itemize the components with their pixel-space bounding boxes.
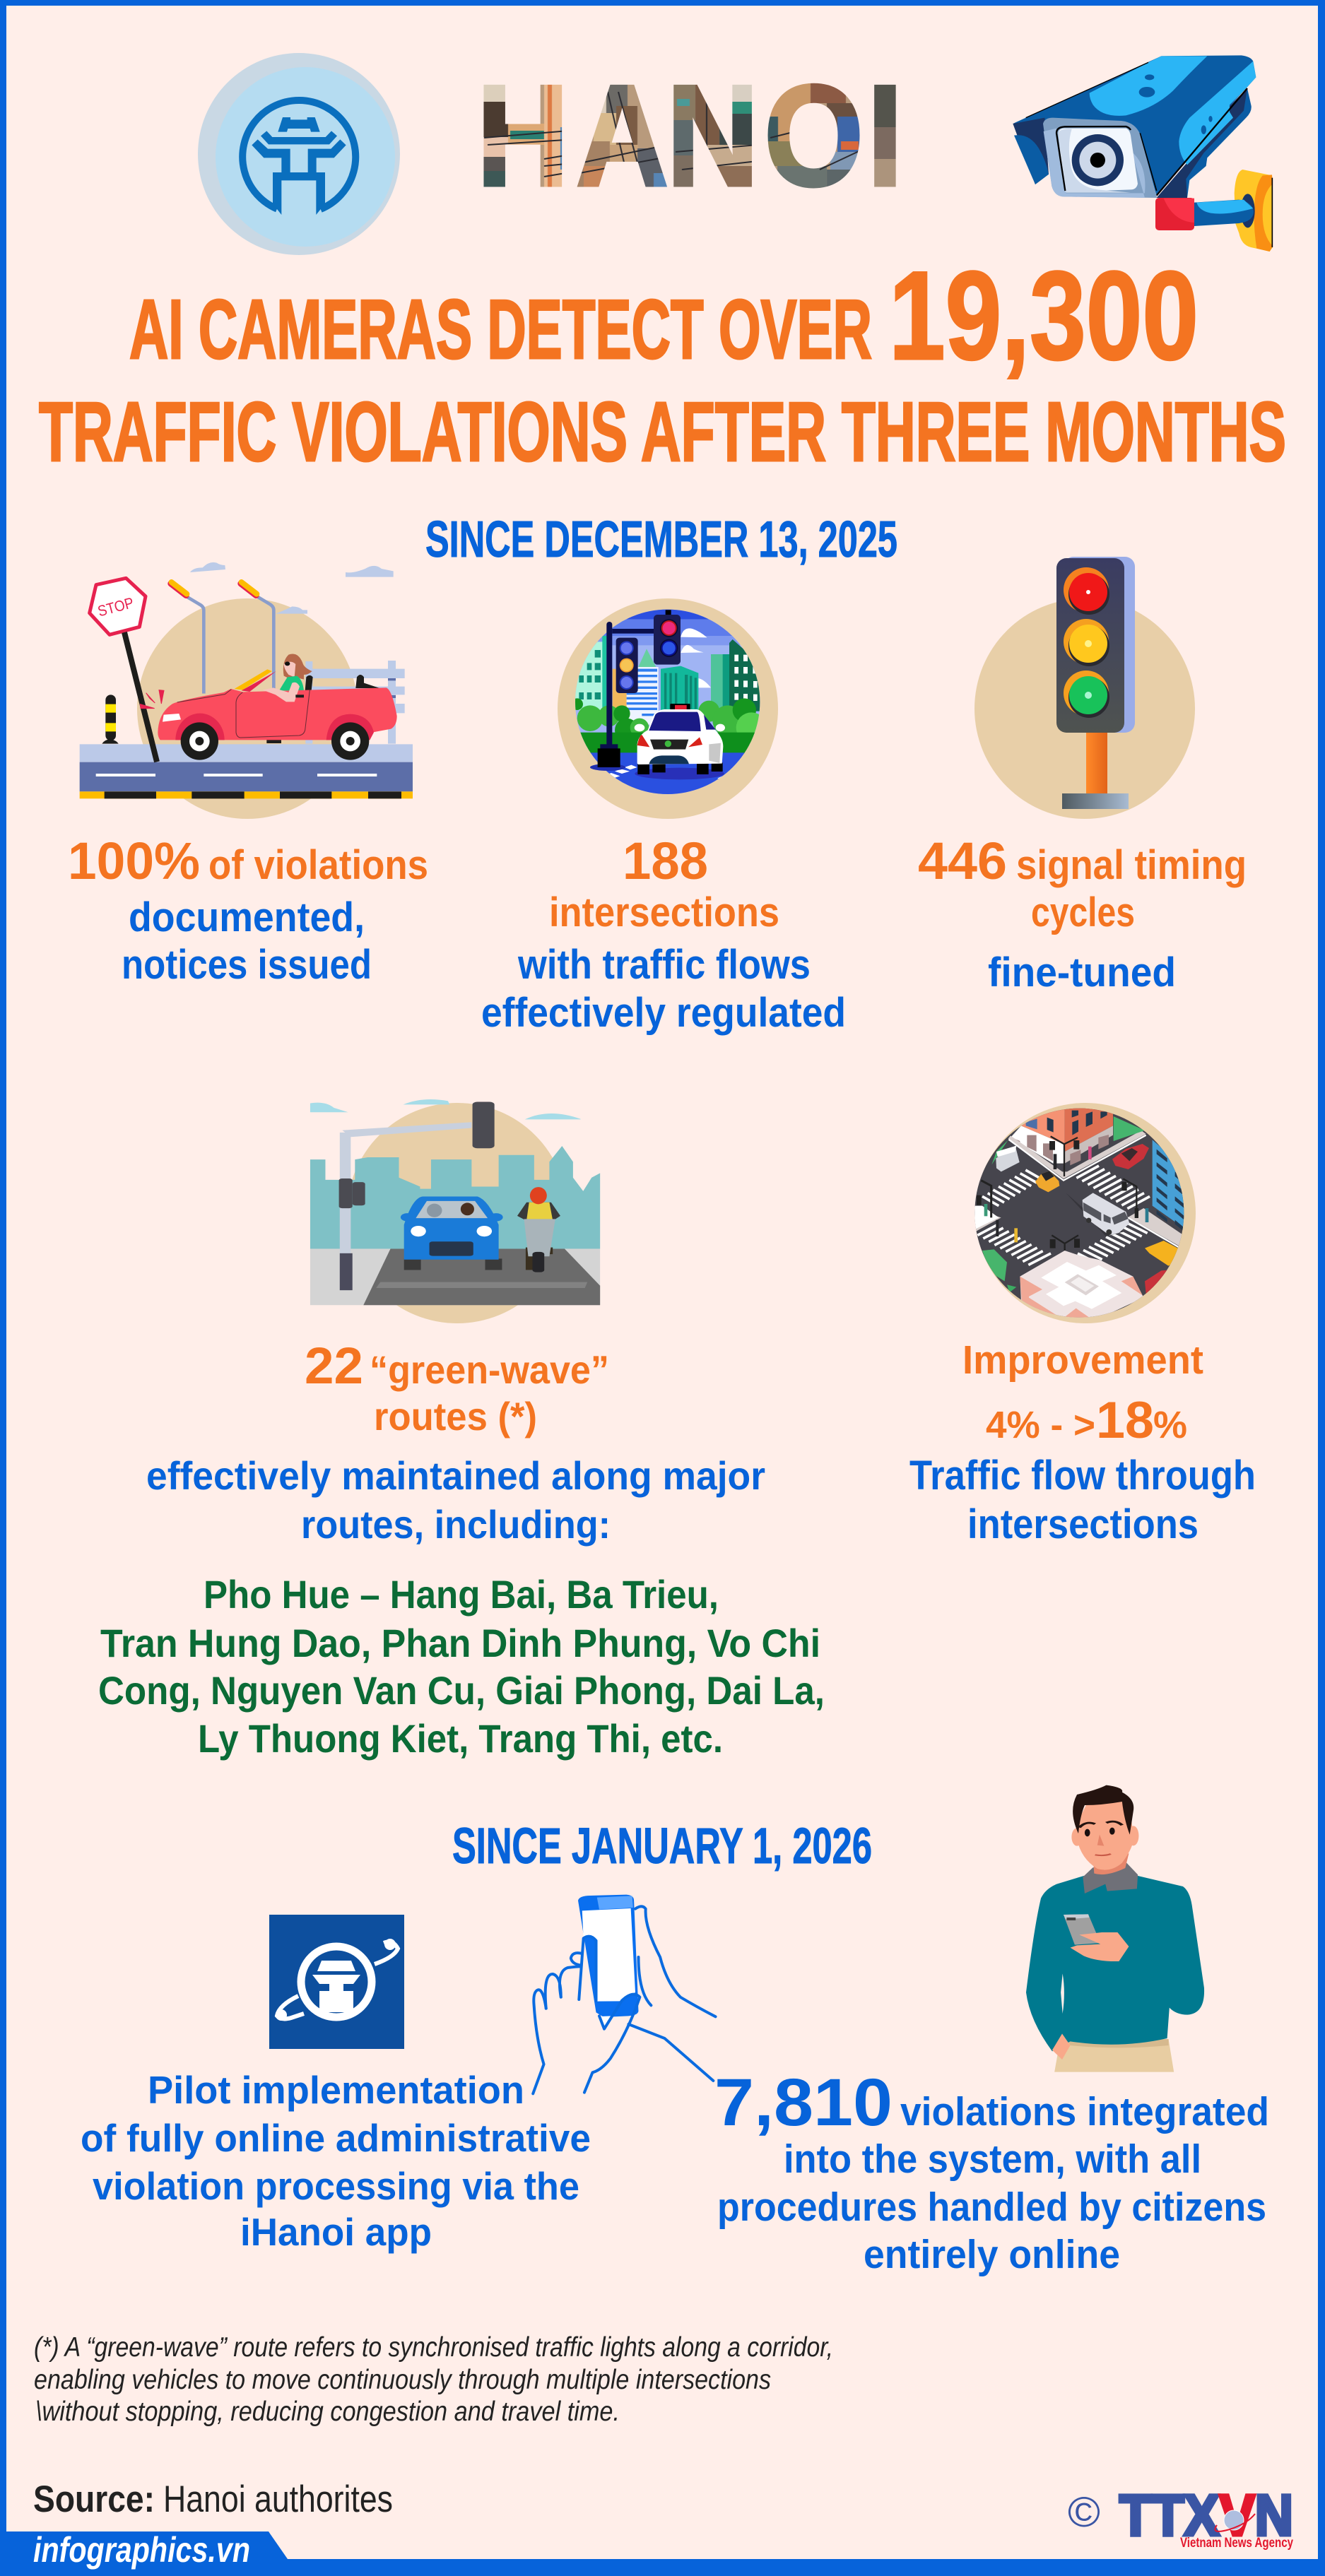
text: list of routes: Pho Hue – Hang Bai, Ba Trieu, (204, 1572, 719, 1617)
text: maintained along major routes (146, 1453, 765, 1547)
label: intersections: intersections (549, 890, 779, 935)
icon: surveillance camera (1013, 55, 1273, 252)
label: routes (*): routes (*) (374, 1394, 537, 1438)
text: traffic flows regulated: with traffic flows (517, 942, 811, 988)
stat: 446 signal timing: signal timing (1016, 842, 1247, 888)
text: traffic flow through intersections (909, 1453, 1256, 1547)
stat: 22 green-wave: “green-wave” (370, 1347, 609, 1392)
text: handled entirely online: entirely online (864, 2232, 1120, 2277)
source line: Hanoi authorites (163, 2478, 393, 2520)
icon: car hitting stop sign: STOP (96, 594, 136, 620)
text: traffic flow through intersections: Traffic flow through (909, 1453, 1256, 1499)
footnote (34, 2332, 833, 2427)
stat: 188: 188 (623, 832, 708, 890)
stat: 4% to 18% (986, 1392, 1187, 1449)
text: maintained along major routes: effectively maintained along major (146, 1453, 765, 1498)
stat: 446 signal timing (918, 832, 1247, 890)
icon: isometric intersection (974, 1108, 1184, 1318)
footnote: enabling vehicles to move continuously through multiple intersections (34, 2365, 771, 2395)
header: HANOI photo lettering: HANOI (477, 55, 903, 215)
stat: 22 green-wave: 22 (305, 1337, 363, 1395)
panel: 7,810 violations integrated (714, 1785, 1269, 2277)
text: list of routes (98, 1572, 825, 1761)
logo: TTXVN Vietnam News Agency: Vietnam News Agency (1180, 2536, 1293, 2551)
text: fine-tuned: fine-tuned (988, 950, 1176, 995)
text: handled entirely online: into the system, with all (784, 2137, 1201, 2182)
footnote: (*) A “green-wave” route refers to synchronised traffic lights along a corridor, (34, 2332, 833, 2363)
text: traffic flows regulated: effectively regulated (481, 990, 846, 1036)
stat: 7,810 violations integrated: violations integrated (900, 2089, 1269, 2134)
stat: 100% of violations (68, 832, 428, 890)
label: cycles: cycles (1031, 890, 1135, 935)
text: pilot implementation: iHanoi app (240, 2210, 432, 2254)
label: improvement: Improvement (962, 1337, 1203, 1383)
text: pilot implementation: Pilot implementation (148, 2068, 524, 2112)
stat: 446 signal timing: 446 (918, 832, 1007, 890)
text: handled entirely online (717, 2137, 1266, 2277)
icon: traffic light (1056, 557, 1135, 809)
text: pilot implementation (81, 2068, 591, 2254)
text: documented notices issued: notices issued (122, 942, 372, 988)
panel: iHanoi pilot (81, 1895, 716, 2254)
text: documented notices issued (122, 894, 372, 988)
text: pilot implementation: of fully online administrative (81, 2116, 591, 2160)
icon: iHanoi app logo (269, 1915, 404, 2049)
panel: 446 signal timing cycles (918, 557, 1247, 995)
section heading: since December: SINCE DECEMBER 13, 2025 (425, 512, 897, 568)
illustration: man with smartphone (1026, 1785, 1204, 2072)
icon: car hitting stop sign (80, 562, 413, 798)
text: traffic flow through intersections: intersections (967, 1501, 1199, 1547)
logo: TTXVN Vietnam News Agency: © (1068, 2488, 1100, 2536)
header: Hanoi emblem (198, 53, 400, 255)
logo: TTXVN Vietnam News Agency: TTXVN (1119, 2483, 1293, 2548)
footnote: \without stopping, reducing congestion and travel time. (35, 2397, 620, 2427)
stat: 100% of violations: of violations (208, 842, 428, 888)
stat: 7,810 violations integrated (714, 2065, 1269, 2140)
stat: 4% to 18%: 4% - > (986, 1404, 1095, 1446)
text: documented notices issued: documented, (129, 894, 365, 940)
text: traffic flows regulated (481, 942, 846, 1036)
text: pilot implementation: violation processing via the (93, 2164, 579, 2208)
source line (33, 2478, 393, 2520)
panel: 188 intersections (481, 598, 846, 1036)
stat: 100% of violations: 100% (68, 832, 200, 890)
text: list of routes: Ly Thuong Kiet, Trang Thi, etc. (198, 1716, 723, 1761)
text: list of routes: Tran Hung Dao, Phan Dinh Phung, Vo Chi (100, 1621, 820, 1665)
stat: 7,810 violations integrated: 7,810 (714, 2065, 893, 2140)
icon: hand holding phone (533, 1895, 716, 2093)
panel: green-wave routes (98, 1099, 825, 1761)
title highlight number: 19,300 (889, 245, 1199, 386)
footer tab: infographics.vn: infographics.vn (33, 2530, 250, 2570)
text: list of routes: Cong, Nguyen Van Cu, Giai Phong, Dai La, (98, 1668, 825, 1713)
title (39, 245, 1286, 479)
stat: 22 green-wave (305, 1337, 609, 1395)
section heading: since January: SINCE JANUARY 1, 2026 (452, 1819, 872, 1874)
stat: 4% to 18%: % (1153, 1404, 1187, 1446)
stat: 4% to 18%: 18 (1096, 1392, 1154, 1449)
title line one: AI CAMERAS DETECT OVER (129, 283, 872, 377)
icon: city street with traffic lights (571, 608, 767, 798)
source line: Source: (33, 2478, 155, 2520)
text: handled entirely online: procedures handled by citizens (717, 2185, 1266, 2230)
panel: improvement in traffic flow (909, 1095, 1256, 1547)
icon: car and motorbike at traffic light (310, 1099, 600, 1305)
text: maintained along major routes: routes, including: (301, 1502, 611, 1547)
panel: violations documented (68, 562, 428, 988)
